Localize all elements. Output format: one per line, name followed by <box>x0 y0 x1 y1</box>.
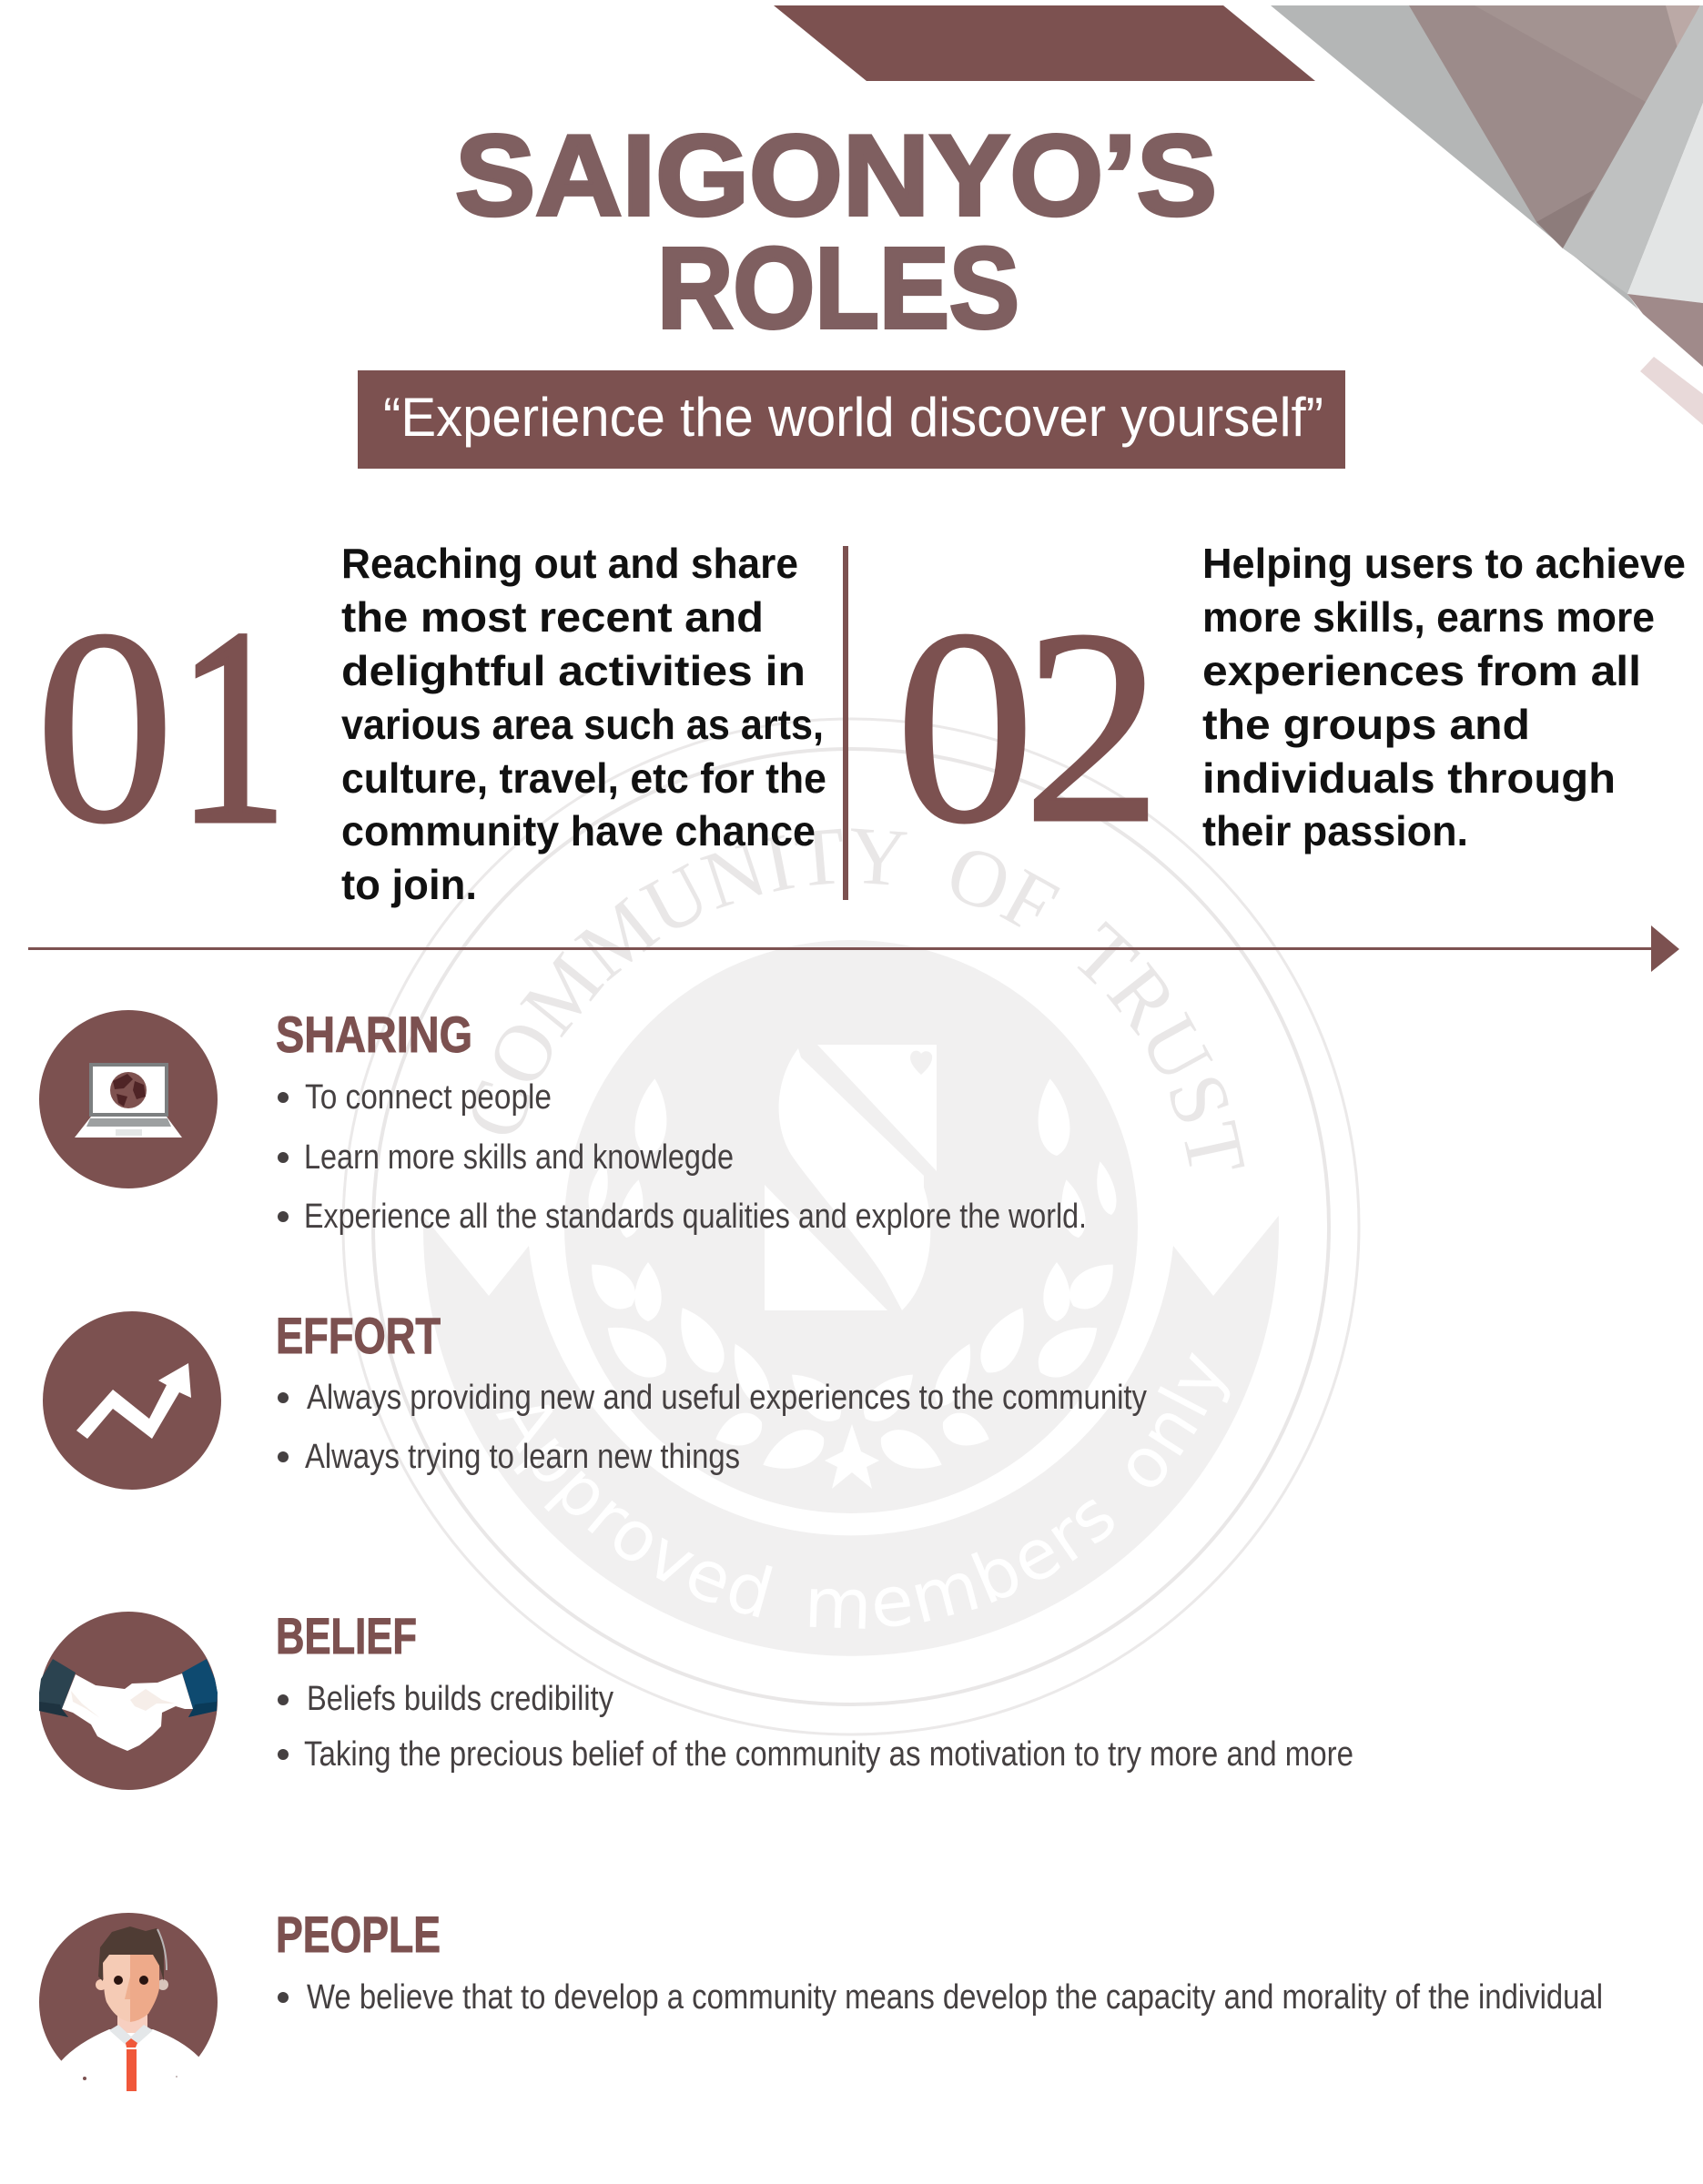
icon: handshake <box>39 1612 218 1790</box>
heading: effort: EFFORT <box>276 1307 441 1364</box>
icon: businessman <box>32 1913 223 2102</box>
sharing bullets: Learn more skills and knowlegde <box>304 1138 734 1177</box>
effort bullets <box>278 1379 1147 1476</box>
title: ROLES <box>657 224 1019 352</box>
number 01 <box>35 572 287 881</box>
number 01: 0 <box>35 572 175 880</box>
heading: belief: BELIEF <box>276 1607 417 1664</box>
role 2 text <box>1202 540 1686 854</box>
tagline banner: “Experience the world discover yourself” <box>383 387 1323 448</box>
tagline banner <box>358 370 1345 469</box>
pink diagonal strip <box>1640 357 1703 425</box>
arrow <box>28 925 1679 972</box>
role 1 text: to join. <box>341 861 477 908</box>
watermark seal: COMMUNITY OF TRUST <box>472 828 1245 1168</box>
role 2 text: the groups and <box>1202 701 1530 748</box>
role 2 text: more skills, earns more <box>1202 593 1655 641</box>
vertical divider <box>843 546 848 900</box>
icon: laptop with globe <box>39 1010 218 1188</box>
number 01: 1 <box>178 573 287 881</box>
role 1 text: delightful activities in <box>341 647 806 694</box>
effort bullets: Always trying to learn new things <box>305 1438 740 1476</box>
heading: sharing: SHARING <box>276 1006 472 1063</box>
belief bullets <box>278 1680 1353 1774</box>
sharing bullets: To connect people <box>305 1078 552 1117</box>
number 02: 02 <box>896 572 1161 880</box>
watermark seal <box>342 717 1360 1736</box>
belief bullets: Beliefs builds credibility <box>307 1680 613 1718</box>
role 1 text <box>341 540 826 908</box>
role 2 text: individuals through <box>1202 754 1616 802</box>
role 2 text: Helping users to achieve <box>1202 540 1686 587</box>
role 1 text: the most recent and <box>341 593 764 641</box>
effort bullets: Always providing new and useful experiences to the community <box>307 1379 1147 1417</box>
role 2 text: experiences from all <box>1202 647 1641 694</box>
role 1 text: various area such as arts, <box>341 701 824 748</box>
role 1 text: culture, travel, etc for the <box>341 754 826 802</box>
role 2 text: their passion. <box>1202 807 1468 854</box>
sharing bullets <box>278 1078 1087 1236</box>
top-right geometric corner <box>1271 5 1703 367</box>
belief bullets: Taking the precious belief of the community as motivation to try more and more <box>304 1735 1353 1774</box>
role 1 text: community have chance <box>341 807 816 854</box>
top brown trapezoid <box>774 5 1315 81</box>
icon: rising arrow <box>43 1311 221 1490</box>
title <box>455 111 1217 352</box>
sharing bullets: Experience all the standards qualities and explore the world. <box>304 1198 1087 1236</box>
heading: people: PEOPLE <box>276 1906 441 1963</box>
role 1 text: Reaching out and share <box>341 540 798 587</box>
title: SAIGONYO’S <box>455 111 1217 239</box>
watermark seal: Approved members only <box>496 1352 1230 1629</box>
